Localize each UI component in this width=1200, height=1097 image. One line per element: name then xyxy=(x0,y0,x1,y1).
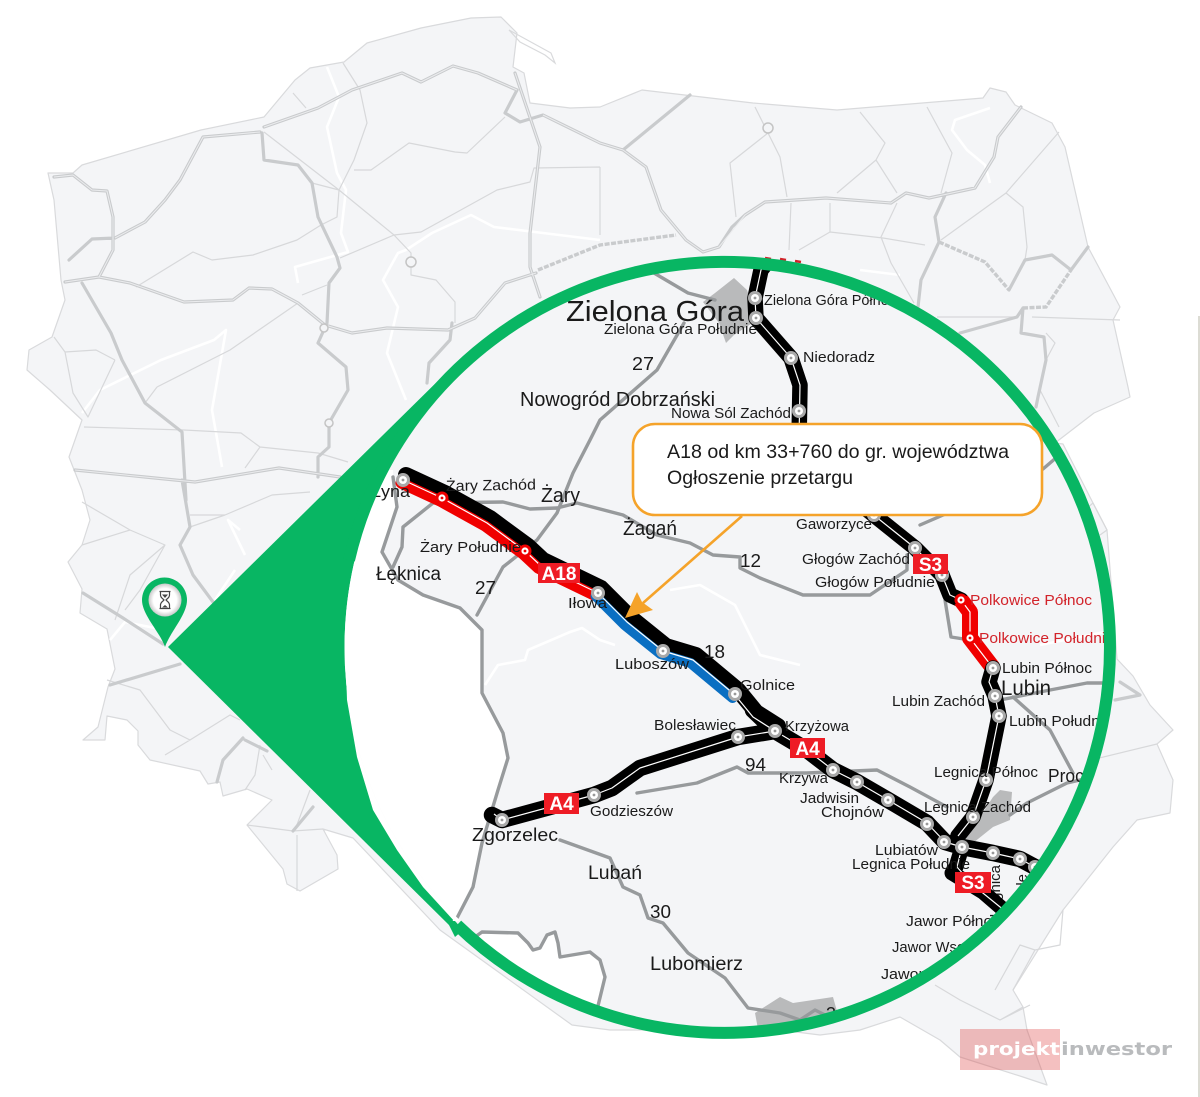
area outside the border xyxy=(344,470,603,1004)
border road xyxy=(382,477,605,1010)
place names: 3 xyxy=(826,1004,836,1024)
route S3 north xyxy=(755,255,800,440)
route S3 middle xyxy=(855,500,993,668)
place names: Zielona Góra Północ xyxy=(764,292,896,309)
place names: Żyna xyxy=(370,482,411,501)
place names: Żary xyxy=(541,484,580,507)
motorways xyxy=(54,66,1140,831)
place names: Żary Południe xyxy=(420,538,521,556)
Hel peninsula xyxy=(509,30,555,63)
place names: Jadwisin xyxy=(800,790,859,807)
red section Polkowice xyxy=(961,600,993,668)
planned expressways xyxy=(538,235,1071,308)
place names: Lubin Północ xyxy=(1002,660,1093,677)
badge A4 main: A4 xyxy=(795,739,820,760)
place names: Żagań xyxy=(623,517,677,540)
callout text: Ogłoszenie przetargu xyxy=(667,467,853,489)
small junction rings xyxy=(320,123,773,427)
place names: Lubań xyxy=(588,863,642,884)
place names: Chojnów xyxy=(821,804,884,821)
route A18 xyxy=(401,475,778,731)
road badges xyxy=(538,554,991,894)
rotated label Legnica: Legnica xyxy=(987,864,1004,918)
place names: Głogów Południe xyxy=(815,574,935,591)
place names: Nowa Sól Zachód xyxy=(671,405,791,422)
mountain area xyxy=(755,997,836,1026)
circle background xyxy=(344,380,1087,920)
place names: Prochowice xyxy=(1048,766,1138,786)
place names: Niedoradz xyxy=(803,349,875,366)
place names: Lubin Południe xyxy=(1009,713,1112,730)
location pin xyxy=(142,578,187,647)
place names: 12 xyxy=(740,551,761,571)
place names: Luboszów xyxy=(615,656,689,673)
regional roads xyxy=(393,273,1110,1020)
route A4 east xyxy=(744,710,1039,874)
junction markers xyxy=(396,291,1042,874)
place names: 27 xyxy=(632,354,654,374)
place names: Legnica Południe xyxy=(852,856,970,873)
route A4 west xyxy=(492,731,775,820)
place names: Golnice xyxy=(740,677,795,694)
place names: Zgorzelec xyxy=(472,825,558,845)
right edge strip xyxy=(1198,316,1200,1097)
callout xyxy=(633,424,1042,515)
place names: Nowogród Dobrzański xyxy=(520,389,715,411)
watermark: inwestor xyxy=(1061,1039,1172,1060)
magnified map circle xyxy=(344,269,1104,1026)
place names: Legnica Zachód xyxy=(924,799,1031,816)
place names: Godzieszów xyxy=(590,803,673,820)
place names: Jawor Wschód xyxy=(892,939,989,956)
rotated label Opole: Opole xyxy=(1014,874,1031,914)
place names xyxy=(370,292,1138,1024)
badge A4 west xyxy=(544,793,579,815)
badge S3 north xyxy=(913,554,948,576)
icon: hourglass xyxy=(160,592,170,608)
white rivers xyxy=(485,585,1115,685)
red section xyxy=(401,483,596,596)
place names: Legnica Północ xyxy=(934,764,1039,781)
place names: Bolesławiec xyxy=(654,717,737,734)
place names: Lubomierz xyxy=(650,954,743,975)
rivers xyxy=(82,67,990,640)
place names: Łęknica xyxy=(376,564,441,585)
city area: Legnica xyxy=(965,790,1012,843)
place names: Jawor Południe xyxy=(881,966,991,983)
place names: Głogów Zachód xyxy=(802,551,910,568)
badge A4 west: A4 xyxy=(549,794,574,815)
badge S3 south xyxy=(955,872,991,894)
callout text: A18 od km 33+760 do gr. województwa xyxy=(667,441,1009,463)
green zoom wedge xyxy=(168,369,520,926)
place names: Krzywa xyxy=(779,770,829,787)
place names: 18 xyxy=(704,642,725,662)
callout text xyxy=(667,441,1009,489)
route S3 south xyxy=(952,847,1005,911)
place names: Lubiatów xyxy=(875,842,938,859)
watermark xyxy=(960,1029,1172,1070)
blue section xyxy=(596,596,732,698)
place names: Iłowa xyxy=(568,595,608,612)
route S3 Lubin to Legnica xyxy=(958,668,999,836)
place names: Zielona Góra Południe xyxy=(604,321,757,338)
place names: Gaworzyce xyxy=(796,516,872,533)
badge S3 south: S3 xyxy=(961,873,985,894)
green magnifier ring xyxy=(349,262,1110,1033)
place names: 94 xyxy=(745,755,766,775)
place names: Polkowice Północ xyxy=(970,592,1093,609)
place names: Zielona Góra xyxy=(566,296,745,328)
arrow: callout to blue section xyxy=(625,516,742,618)
badge S3 north: S3 xyxy=(919,555,942,576)
badge A18: A18 xyxy=(542,564,576,585)
watermark: projekt xyxy=(973,1039,1060,1060)
place names: Polkowice Południe xyxy=(979,630,1114,647)
place names: Jawor Północ xyxy=(906,913,1001,930)
place names: 27 xyxy=(475,578,496,598)
place names: Krzyżowa xyxy=(785,718,850,735)
badge A4 main xyxy=(790,738,825,760)
place names: Żary Zachód xyxy=(446,475,536,495)
place names: Lubin Zachód xyxy=(892,693,985,710)
place names: 30 xyxy=(650,902,671,922)
place names: Lubin xyxy=(1001,677,1051,700)
wedge inner curve xyxy=(345,640,520,922)
city area: Zielona Góra xyxy=(703,278,751,343)
red road stub above ring xyxy=(765,258,801,262)
